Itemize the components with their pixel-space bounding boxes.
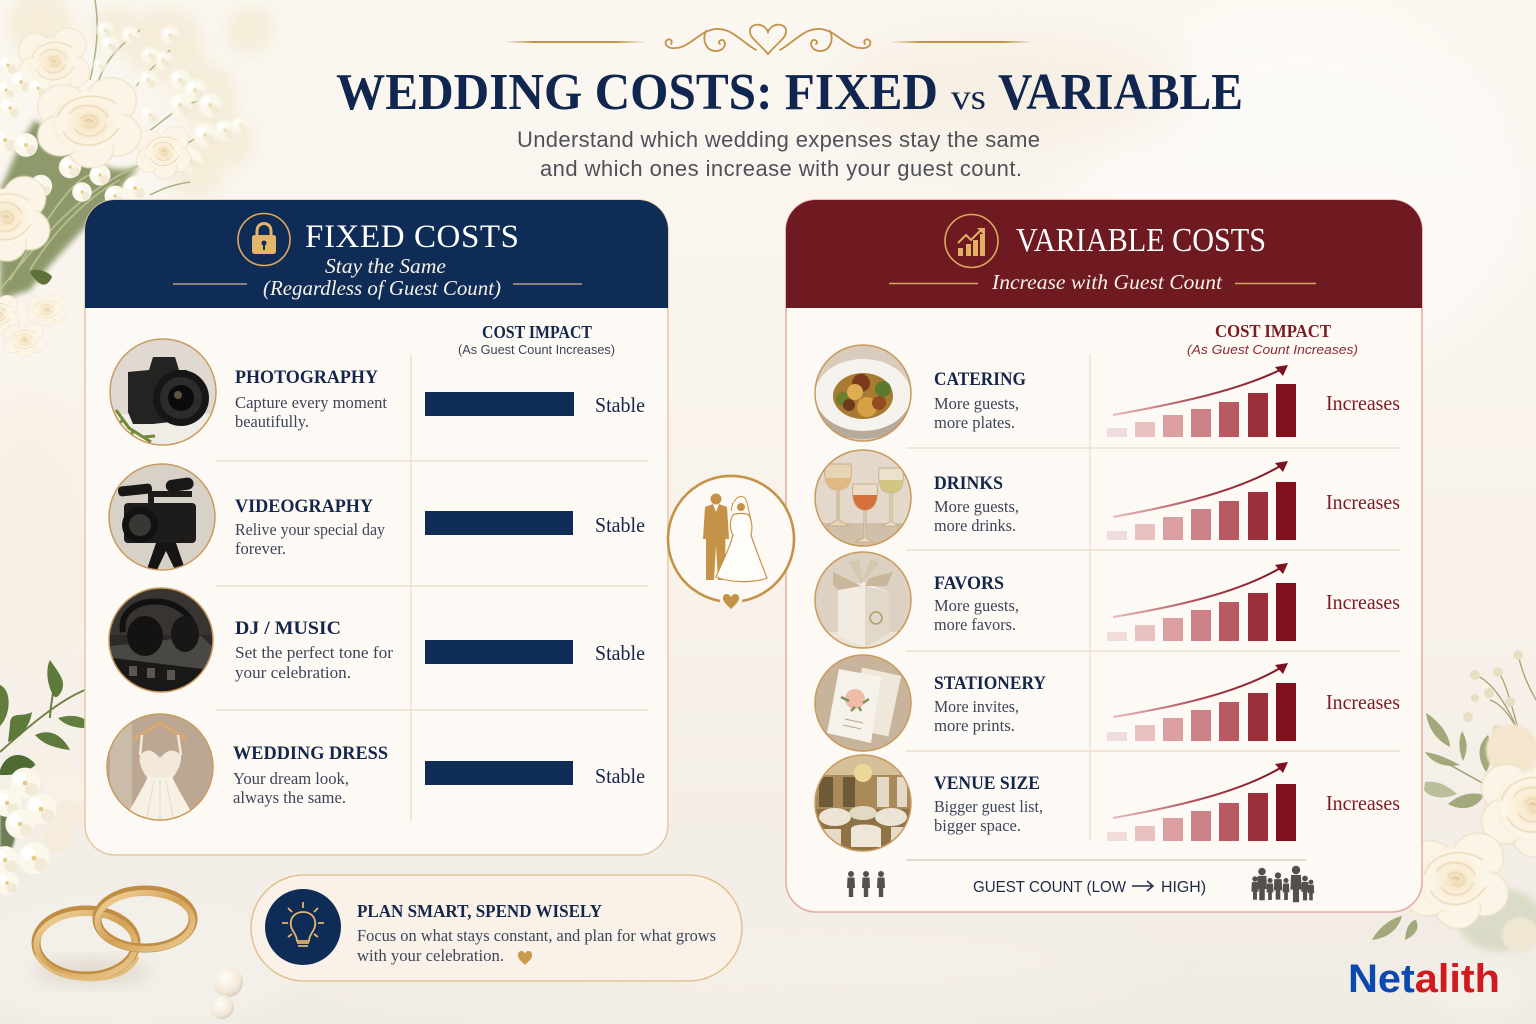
description: More invites, (934, 697, 1019, 716)
description (235, 643, 394, 682)
description: More guests, (934, 596, 1019, 615)
label: STATIONERY (934, 673, 1046, 694)
description: more plates. (934, 413, 1015, 432)
arrow: rising trend (1113, 762, 1288, 818)
floral corner, bottom right (1370, 650, 1536, 1018)
description: Capture every moment (235, 393, 387, 412)
description: bigger space. (934, 816, 1021, 835)
value: Increases (1326, 791, 1400, 815)
description: more prints. (934, 716, 1015, 735)
description (233, 769, 349, 807)
value: Increases (1326, 590, 1400, 614)
arrow: rising trend (1113, 563, 1288, 617)
bar chart: rising (1107, 663, 1296, 741)
row: photography (108, 337, 645, 447)
bar: stable (425, 511, 573, 535)
callout text: Focus on what stays constant, and plan for what grows (357, 926, 716, 945)
title: vs (951, 77, 986, 117)
panel: fixed costs (85, 200, 668, 855)
subtitle: and which ones increase with your guest count. (540, 156, 1022, 181)
row: wedding dress (105, 712, 645, 822)
header subtitle: (Regardless of Guest Count) (263, 276, 501, 300)
description: more drinks. (934, 516, 1016, 535)
photo: gift box (813, 550, 913, 650)
bar chart: rising (1107, 461, 1296, 540)
description (934, 797, 1043, 835)
photo: video camera (107, 462, 217, 572)
description: more favors. (934, 615, 1016, 634)
label: FAVORS (934, 573, 1004, 594)
icon: padlock (238, 214, 290, 266)
heading: fixed costs: FIXED COSTS (305, 219, 519, 255)
icon: rising chart (945, 214, 998, 268)
header subtitle (173, 254, 582, 300)
description (235, 520, 386, 558)
description: Set the perfect tone for (235, 643, 394, 662)
description: your celebration. (235, 663, 351, 682)
column heading: cost impact (1187, 321, 1358, 357)
heading: variable costs: VARIABLE COSTS (1016, 222, 1266, 259)
column heading: cost impact: (As Guest Count Increases) (458, 343, 615, 357)
icon: small heart (518, 951, 532, 965)
bar chart: rising (1107, 762, 1296, 841)
bar: stable (425, 392, 574, 416)
arrow: rising trend (1113, 663, 1288, 717)
row: catering (813, 343, 1400, 443)
description: Relive your special day (235, 520, 386, 539)
description (235, 393, 387, 431)
value: Stable (595, 393, 645, 417)
label: PHOTOGRAPHY (235, 367, 378, 388)
top ornament (506, 25, 1031, 54)
description: Your dream look, (233, 769, 349, 788)
header subtitle: Increase with Guest Count (991, 270, 1223, 294)
column heading: cost impact: COST IMPACT (482, 322, 592, 342)
arrow: rising trend (1113, 461, 1288, 517)
pearls (210, 967, 243, 1019)
value: Stable (595, 513, 645, 537)
row: videography (107, 462, 645, 572)
description: always the same. (233, 788, 346, 807)
row: stationery (813, 653, 1400, 753)
row: drinks (813, 448, 1400, 548)
icon: heart (723, 594, 739, 609)
title: VARIABLE (998, 64, 1243, 121)
photo: invitation cards (813, 653, 913, 753)
description (934, 497, 1019, 535)
bar chart: rising (1107, 365, 1296, 437)
column heading: cost impact: COST IMPACT (1215, 321, 1331, 341)
photo: camera (108, 337, 218, 447)
bar: stable (425, 640, 573, 664)
row: dj music (106, 585, 645, 695)
icon: few guests (847, 871, 885, 897)
panel: variable costs (786, 200, 1422, 912)
photo: plate of food (813, 343, 913, 443)
header subtitle: Stay the Same (325, 254, 446, 278)
description: beautifully. (235, 412, 309, 431)
icon: groom (703, 494, 729, 580)
axis label: guest count: HIGH) (1161, 879, 1206, 896)
photo: wine glasses (813, 448, 913, 548)
description: More guests, (934, 394, 1019, 413)
photo: dress (105, 712, 215, 822)
floral bouquet, top left (0, 0, 274, 357)
label: VENUE SIZE (934, 773, 1040, 794)
bottom left flowers and leaves (0, 660, 86, 895)
value: Increases (1326, 490, 1400, 514)
subtitle (517, 127, 1040, 181)
bar: stable (425, 761, 573, 785)
wedding rings (34, 890, 193, 985)
callout heading: PLAN SMART, SPEND WISELY (357, 901, 602, 921)
label: DJ / MUSIC (235, 618, 341, 639)
icon: bride (716, 496, 767, 582)
icon: light bulb (265, 889, 341, 965)
value: Stable (595, 641, 645, 665)
center medallion: couple (668, 476, 794, 609)
axis label: guest count (973, 879, 1206, 896)
callout text: with your celebration. (357, 946, 504, 965)
title: WEDDING COSTS: FIXED (336, 64, 938, 121)
label: DRINKS (934, 473, 1003, 494)
icon: many guests (1251, 866, 1314, 902)
arrow: rising trend (1113, 365, 1288, 415)
label: WEDDING DRESS (233, 743, 388, 764)
description (934, 697, 1019, 735)
description: Bigger guest list, (934, 797, 1043, 816)
photo: headphones on mixer (106, 585, 216, 695)
value: Increases (1326, 391, 1400, 415)
photo: banquet hall (813, 753, 913, 853)
logo: Netalith: Netalith (1348, 957, 1500, 1001)
row: favors (813, 550, 1400, 650)
column heading: cost impact: (As Guest Count Increases) (1187, 343, 1358, 357)
column heading: cost impact (458, 322, 615, 357)
row: venue size (813, 753, 1400, 853)
description (934, 394, 1019, 432)
callout text (357, 926, 716, 965)
value: Stable (595, 764, 645, 788)
subtitle: Understand which wedding expenses stay the same (517, 127, 1040, 152)
description (934, 596, 1019, 634)
callout: plan smart (251, 875, 742, 981)
label: CATERING (934, 369, 1026, 390)
description: forever. (235, 539, 286, 558)
description: More guests, (934, 497, 1019, 516)
bar chart: rising (1107, 563, 1296, 641)
label: VIDEOGRAPHY (235, 496, 373, 517)
axis label: guest count: GUEST COUNT (LOW (973, 879, 1126, 896)
value: Increases (1326, 690, 1400, 714)
